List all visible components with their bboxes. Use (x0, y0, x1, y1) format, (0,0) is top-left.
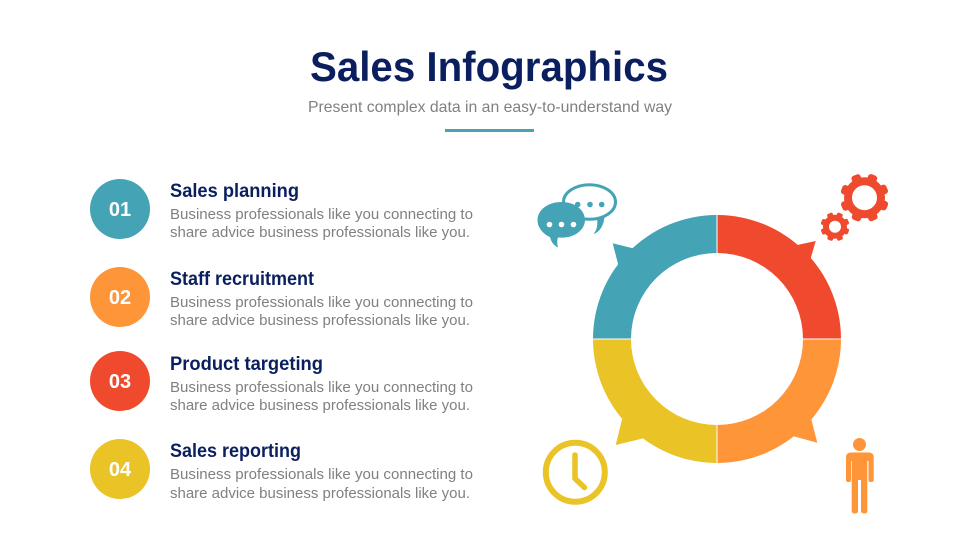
small gear (820, 212, 850, 241)
list item 02: staff recruitment: 02 (109, 287, 131, 309)
title: Sales Infographics (310, 43, 668, 90)
list item 01: sales planning: share advice business professionals like you. (170, 224, 470, 241)
segment: yellow (593, 340, 716, 463)
list item 02: staff recruitment: share advice business professionals like you. (170, 312, 470, 329)
large gear (840, 173, 889, 222)
list item 04: sales reporting (90, 439, 473, 502)
list item 03: product targeting: Product targeting (170, 353, 323, 375)
list item 01: sales planning: Business professionals like you connecting to (170, 206, 473, 223)
list item 03: product targeting: share advice business professionals like you. (170, 397, 470, 414)
list item 02: staff recruitment: Staff recruitment (170, 268, 314, 290)
list item 04: sales reporting: 04 (109, 459, 132, 481)
list item 04: sales reporting: Sales reporting (170, 440, 301, 462)
list item 04: sales reporting: Business professionals like you connecting to (170, 466, 473, 483)
icon: clock (546, 443, 605, 502)
segment: red (718, 215, 841, 338)
list item 03: product targeting (90, 351, 473, 414)
list item 01: sales planning: Sales planning (170, 180, 299, 202)
icon: gears (820, 173, 889, 241)
list item 02: staff recruitment (90, 267, 473, 329)
list item 02: staff recruitment: Business professionals like you connecting to (170, 294, 473, 311)
list item 01: sales planning (90, 179, 473, 241)
list item 03: product targeting: 03 (109, 371, 131, 393)
icon: person (846, 438, 874, 514)
subtitle: Present complex data in an easy-to-understand way (308, 99, 672, 116)
list item 01: sales planning: 01 (109, 199, 131, 221)
segment: orange (718, 340, 841, 463)
list item 04: sales reporting: share advice business professionals like you. (170, 485, 470, 502)
list item 03: product targeting: Business professionals like you connecting to (170, 379, 473, 396)
icon: chat bubbles (538, 185, 616, 248)
donut chart (593, 215, 841, 463)
title underline (445, 129, 534, 132)
segment: teal (593, 215, 716, 338)
